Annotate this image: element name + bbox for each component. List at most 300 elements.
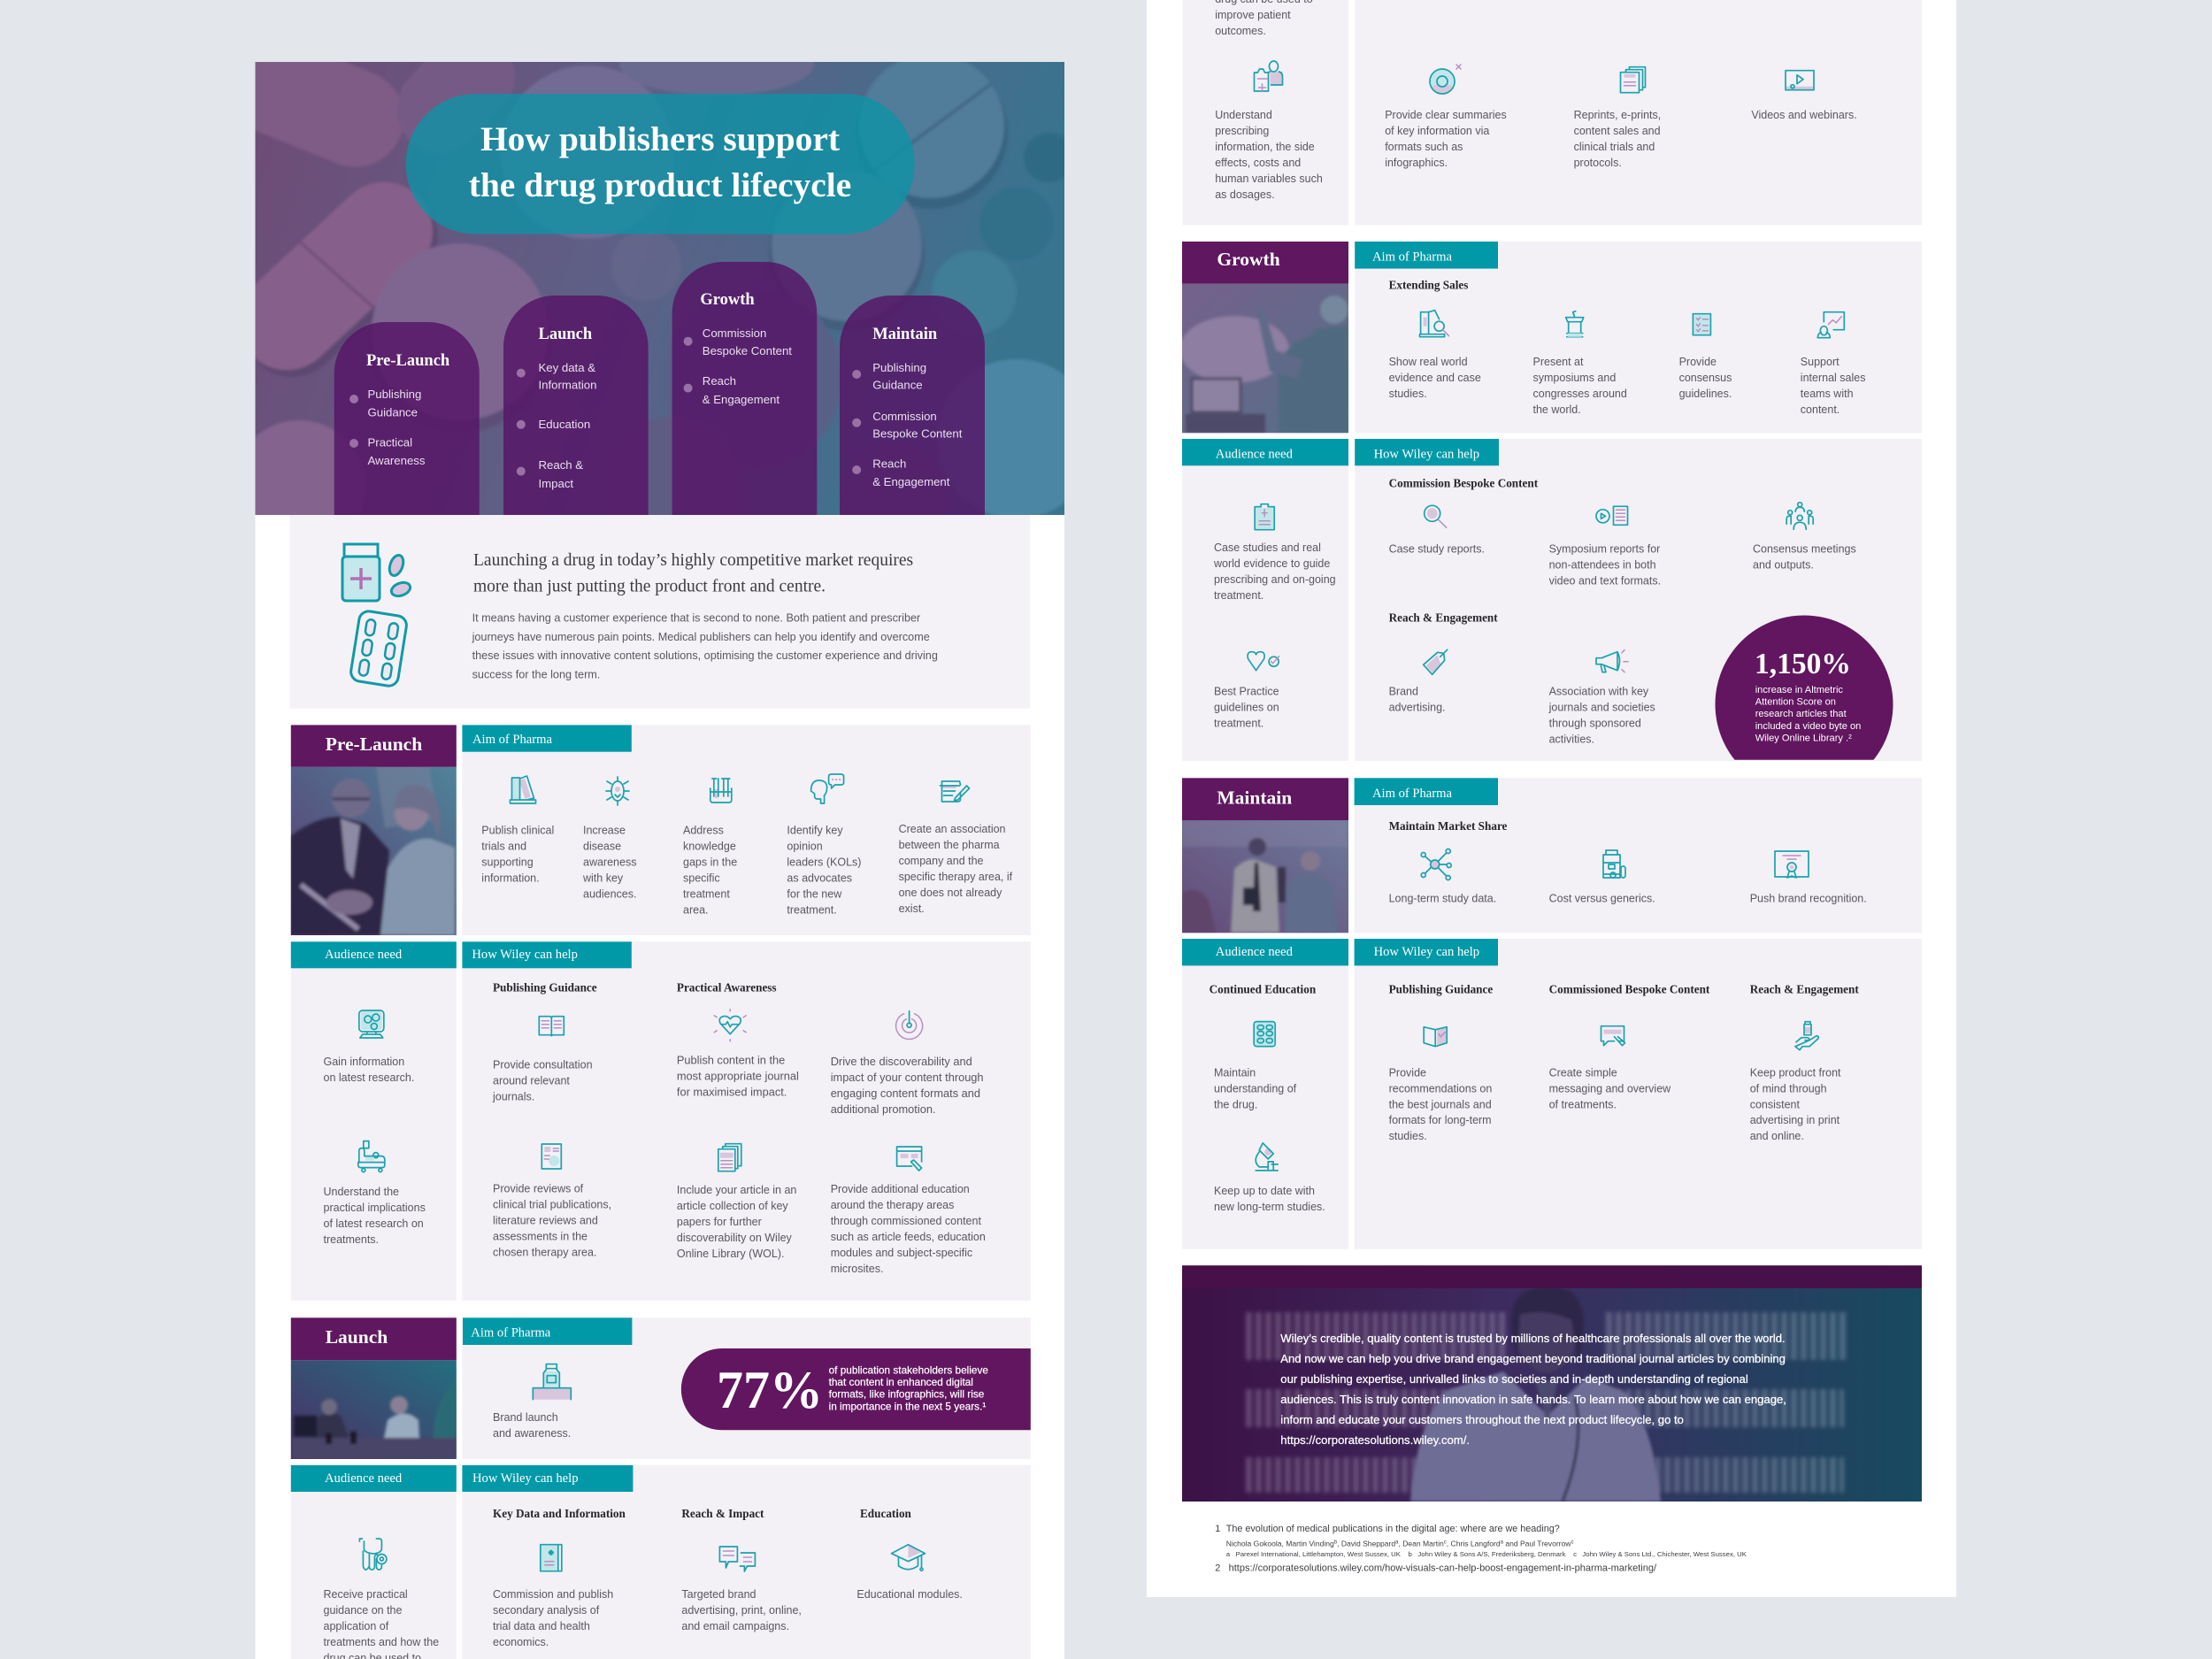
- text: Provide additional education: around the therapy areas: [831, 1199, 954, 1211]
- panel: Launch help continued: [1355, 0, 1922, 225]
- heading: Reach &amp; Engagement: Reach & Engagement: [1389, 611, 1498, 624]
- tab: How Wiley can help: [1355, 439, 1499, 465]
- text: Identify key: treatment.: [787, 904, 837, 917]
- icon: clipboard and person: [1255, 61, 1283, 91]
- icon: podium: [1566, 311, 1584, 337]
- icon: monitor with molecules: [359, 1010, 384, 1038]
- section: Pre-Launch: [290, 725, 1031, 1301]
- references: [1215, 1524, 1747, 1573]
- icon: checklist: [1693, 314, 1710, 335]
- text: Best Practice: treatment.: [1214, 717, 1263, 729]
- tab: Pre-Launch: Guidance: [368, 405, 418, 419]
- references: b: [1334, 1540, 1338, 1545]
- text: Understand prescribing: information, the side: [1215, 141, 1315, 153]
- heading: Reach &amp; Engagement: Reach & Engagement: [1750, 982, 1859, 996]
- panel: Pre-Launch aim: [462, 725, 1031, 935]
- text: improve patient outcomes: outcomes.: [1215, 25, 1266, 37]
- panel: Maintain aim: [1355, 778, 1922, 933]
- intro body: It means having a customer experience that is second to none. Both patient and prescriber: [472, 612, 920, 625]
- text: Videos and webinars: Videos and webinars.: [1751, 109, 1857, 121]
- text: Publish clinical: trials and: [481, 841, 526, 853]
- panel: Maintain aim: Aim of Pharma: [1372, 787, 1453, 801]
- closing text: And now we can help you drive brand engagement beyond traditional journal articles by combining: [1280, 1352, 1786, 1365]
- tab: Launch: Education: [538, 418, 590, 431]
- text: Drive the discoverability: Drive the discoverability and: [831, 1055, 972, 1068]
- text: Create an association: one does not already: [899, 887, 1002, 899]
- text: Provide recommendations: the best journals and: [1389, 1098, 1492, 1110]
- text: Long-term study data: Long-term study data.: [1389, 893, 1496, 905]
- text: Create an association: exist.: [899, 902, 925, 915]
- text: Association: activities.: [1549, 733, 1594, 745]
- references: https://corporatesolutions.wiley.com/how-visuals-can-help-boost-engagement-in-pharma-marketing/: [1229, 1563, 1657, 1573]
- text: Show real world: Show real world: [1389, 356, 1468, 368]
- panel: Pre-Launch header and photo: [290, 725, 457, 935]
- text: Provide clear summaries: Provide clear summaries: [1385, 109, 1507, 121]
- panel: Maintain header and photo: Maintain: [1217, 787, 1292, 809]
- panel: Growth header and photo: Growth: [1217, 249, 1280, 270]
- text: Association: journals and societies: [1548, 701, 1655, 713]
- text: Publish content: for maximised impact.: [677, 1085, 787, 1099]
- icon: stethoscope: [359, 1539, 387, 1570]
- text: improve patient outcomes: improve patient: [1215, 9, 1291, 21]
- text: Receive practical: guidance on the: [324, 1604, 403, 1617]
- icon: KOL head and speech: [811, 774, 844, 803]
- text: Commission and publish: Commission and publish: [493, 1588, 613, 1601]
- closing text: audiences. This is truly content innovation in safe hands. To learn more about how we can engage,: [1280, 1393, 1786, 1406]
- tab: Audience need: [1182, 939, 1348, 965]
- text: Understand the practical: practical implications: [324, 1202, 426, 1214]
- text: Address knowledge: gaps in the: [683, 856, 737, 869]
- closing text: inform and educate your customers throughout the next product lifecycle, go to: [1280, 1413, 1684, 1426]
- panel: Launch how Wiley can help: How Wiley can help: [472, 1471, 579, 1486]
- icon: article stack: [718, 1144, 741, 1171]
- section: Growth: [1179, 242, 1922, 793]
- text: Brand advertising: advertising.: [1389, 701, 1446, 713]
- text: Provide clear summaries: formats such as: [1385, 141, 1463, 153]
- tab: Maintain: Reach: [872, 457, 906, 471]
- icon: magnifier chart: [1425, 505, 1447, 527]
- text: Provide reviews: literature reviews and: [493, 1214, 598, 1226]
- tab: Audience need: [1182, 439, 1348, 465]
- text: Increase disease: audiences.: [583, 888, 636, 901]
- icon: microscope: [1256, 1143, 1278, 1171]
- intro body: journeys have numerous pain points. Medical publishers can help you identify and overcome: [472, 631, 930, 643]
- text: Symposium reports: non-attendees in both: [1549, 558, 1656, 571]
- title pill: [406, 94, 915, 234]
- tab: Launch: Reach &: [538, 458, 583, 472]
- icon: book with check: [1424, 1027, 1447, 1047]
- tab: Growth: Commission: [703, 326, 766, 340]
- text: Identify key: leaders (KOLs): [787, 856, 861, 869]
- text: Drive the discoverability: additional promotion.: [831, 1102, 936, 1116]
- text: Address knowledge: treatment: [683, 888, 730, 901]
- photo: doctors with tablet: [290, 762, 455, 935]
- text: Drive the discoverability: engaging content formats and: [831, 1087, 980, 1100]
- heading: Maintain Market Share: Maintain Market Share: [1389, 819, 1508, 833]
- icon: document stack: [1621, 67, 1646, 93]
- references: Nichola Gokoola, Martin Vinding: [1226, 1540, 1334, 1548]
- text: Create an association: between the pharma: [899, 839, 1000, 851]
- icon: bottle on pedestal: [533, 1364, 571, 1400]
- text: Include your article: Online Library (WOL).: [677, 1248, 784, 1260]
- panel: Pre-Launch audience need: [291, 941, 457, 1301]
- text: Best Practice: Best Practice: [1214, 685, 1279, 697]
- panel: Pre-Launch audience need: Audience need: [325, 948, 403, 962]
- header: Pre-Launch: [291, 725, 457, 767]
- closing banner: [1182, 1265, 1922, 1502]
- panel: Launch audience continued: [1182, 0, 1348, 225]
- text: Provide additional education: such as article feeds, education: [831, 1231, 986, 1243]
- panel: Maintain how Wiley can help: How Wiley can help: [1374, 945, 1479, 959]
- panel: Launch how Wiley can help: [462, 1465, 1031, 1659]
- icon: presenter with chart: [1817, 312, 1844, 338]
- icon: medicine bottle and pills: [342, 544, 412, 687]
- panel: Launch aim: [462, 1317, 1031, 1459]
- text: Provide clear summaries: infographics.: [1385, 157, 1448, 169]
- panel: Launch audience need: [291, 1465, 457, 1659]
- callout: 77%: of publication stakeholders believe: [829, 1363, 988, 1376]
- text: Provide reviews: chosen therapy area.: [493, 1246, 596, 1258]
- text: Increase disease: with key: [582, 872, 624, 885]
- header: Maintain: [1182, 778, 1348, 820]
- tab: Pre-Launch: Awareness: [368, 454, 426, 467]
- callout: 77%: in importance in the next 5 years.¹: [829, 1400, 986, 1412]
- references: , Dean Martin: [1398, 1540, 1444, 1548]
- callout: 77%: that content in enhanced digital: [829, 1376, 973, 1388]
- heading: Publishing Guidance: Publishing Guidance: [1389, 982, 1493, 996]
- photo: doctor in library: [1246, 1286, 1847, 1502]
- tab: Launch: [503, 296, 649, 515]
- icon: donut chart: [1430, 65, 1461, 94]
- text: Understand the practical: Understand the: [324, 1186, 399, 1198]
- left white page: [255, 62, 1064, 1659]
- header: Launch: [291, 1317, 457, 1360]
- icon: megaphone: [1596, 650, 1628, 672]
- photo: team meeting: [292, 1379, 457, 1459]
- text: Provide consultation: journals.: [492, 1091, 534, 1103]
- text: Provide consultation: Provide consultation: [493, 1059, 593, 1071]
- hero banner: [255, 62, 1064, 515]
- text: Case study reports: Case study reports.: [1389, 542, 1485, 555]
- tab: Launch: Launch: [538, 326, 593, 343]
- text: Drive the discoverability: impact of your content through: [831, 1071, 984, 1084]
- text: Provide recommendations: Provide: [1389, 1067, 1426, 1079]
- photo: doctors walking: [1182, 820, 1348, 933]
- tab: Maintain: & Engagement: [872, 475, 950, 488]
- tab: How Wiley can help: [462, 941, 632, 968]
- text: Receive practical: treatments and how the: [324, 1636, 439, 1648]
- references: The evolution of medical publications in the digital age: where are we heading?: [1226, 1524, 1560, 1534]
- text: Create an association: company and the: [899, 855, 984, 867]
- text: Symposium reports: Symposium reports for: [1549, 542, 1660, 555]
- text: Provide reviews: Provide reviews of: [493, 1182, 583, 1194]
- text: Association: Association with key: [1549, 685, 1648, 697]
- references: a: [1395, 1540, 1399, 1545]
- text: Create simple: Create simple: [1549, 1067, 1617, 1079]
- text: Publish clinical: Publish clinical: [481, 825, 554, 837]
- tab: Aim of Pharma: [463, 1317, 632, 1345]
- icon: hand holding bottle: [1795, 1022, 1818, 1050]
- panel: Growth aim: [1355, 242, 1922, 433]
- callout: 1,150%: research articles that: [1755, 709, 1847, 719]
- text: Publish content: most appropriate journal: [677, 1069, 799, 1083]
- closing text: our publishing expertise, unrivalled links to societies and in-depth understanding of regional: [1280, 1372, 1748, 1386]
- section: Maintain: [1182, 778, 1922, 1249]
- text: Present at symposiums: symposiums and: [1532, 372, 1616, 384]
- callout: 1,150%: included a video byte on: [1755, 721, 1861, 732]
- hero pills photo: [255, 62, 1064, 515]
- text: Publish content: Publish content in the: [677, 1053, 785, 1067]
- text: Support internal sales: teams with: [1801, 388, 1854, 400]
- panel: Growth how Wiley can help: How Wiley can help: [1374, 448, 1479, 462]
- text: Keep product front: Keep product front: [1750, 1067, 1841, 1079]
- panel: Maintain how Wiley can help: [1355, 939, 1922, 1249]
- tab: Growth: Reach: [703, 374, 736, 388]
- text: Brand launch: Brand launch: [493, 1411, 558, 1424]
- text: Create an association: Create an association: [899, 823, 1006, 835]
- text: Targeted brand: and email campaigns.: [681, 1620, 789, 1632]
- icon: screen and pen: [1601, 1026, 1624, 1046]
- closing text: https://corporatesolutions.wiley.com/.: [1280, 1433, 1470, 1447]
- references: c: [1444, 1540, 1447, 1545]
- text: Maintain understanding: the drug.: [1214, 1098, 1257, 1110]
- tab: Growth: Growth: [700, 291, 755, 309]
- references: 1: [1215, 1524, 1220, 1534]
- panel: Growth header and photo: [1179, 242, 1348, 433]
- tab: Aim of Pharma: [1355, 242, 1498, 269]
- references: a Parexel International, Littlehampton, West Sussex, UK b John Wiley & Sons A/S, Frederiksberg, Denmark c John Wiley & Sons Ltd., Chichester, West Sussex, UK: [1226, 1550, 1747, 1558]
- references: , David Sheppard: [1337, 1540, 1395, 1548]
- text: Provide additional education: modules and subject-specific: [831, 1247, 972, 1259]
- text: Case studies: treatment.: [1214, 589, 1263, 602]
- text: Maintain understanding: understanding of: [1214, 1082, 1297, 1094]
- heading: Publishing Guidance: Publishing Guidance: [493, 980, 597, 995]
- text: Identify key: opinion: [787, 841, 823, 853]
- text: Address knowledge: knowledge: [683, 841, 736, 853]
- text: Present at symposiums: the world.: [1532, 403, 1581, 416]
- text: Keep product front: advertising in print: [1750, 1114, 1840, 1126]
- photo: conference speaker: [1179, 296, 1348, 433]
- text: Understand prescribing: as dosages.: [1215, 188, 1275, 201]
- tab: Audience need: [291, 1465, 457, 1492]
- text: Reprints, e-prints: protocols.: [1574, 157, 1622, 169]
- tab: Maintain: Bespoke Content: [872, 426, 963, 440]
- callout: 1,150%: Wiley Online Library .²: [1755, 733, 1852, 743]
- text: Reprints, e-prints: content sales and: [1574, 125, 1661, 137]
- text: Increase disease: Increase: [583, 825, 626, 837]
- text: Understand prescribing: prescribing: [1215, 125, 1269, 137]
- text: Increase disease: awareness: [583, 856, 636, 869]
- references: c: [1571, 1540, 1573, 1545]
- text: Address knowledge: area.: [683, 904, 708, 917]
- icon: video player: [1786, 71, 1814, 90]
- text: Reprints, e-prints: clinical trials and: [1574, 141, 1655, 153]
- text: Reprints, e-prints: Reprints, e-prints,: [1574, 109, 1661, 121]
- text: Educational modules: Educational modules.: [856, 1588, 963, 1601]
- text: Provide recommendations: formats for long-term: [1389, 1114, 1492, 1126]
- text: Provide recommendations: recommendations on: [1389, 1082, 1492, 1094]
- closing text: Wiley’s credible, quality content is trusted by millions of healthcare professionals all over the world.: [1280, 1332, 1786, 1345]
- tab: Growth: [672, 262, 817, 515]
- icon: medical book: [541, 1545, 562, 1571]
- tab: Pre-Launch: Practical: [368, 435, 412, 449]
- text: Case studies: Case studies and real: [1214, 541, 1321, 554]
- tab: Aim of Pharma: [1355, 778, 1498, 805]
- icon: chat bubbles: [719, 1547, 755, 1571]
- icon: network: [1421, 849, 1451, 879]
- text: Support internal sales: internal sales: [1801, 372, 1865, 384]
- panel: introduction: [289, 515, 1030, 709]
- callout: 1,150%: increase in Altmetric: [1755, 685, 1843, 695]
- heading: Reach &amp; Impact: Reach & Impact: [681, 1507, 764, 1520]
- text: Address knowledge: specific: [683, 872, 720, 885]
- tab: Aim of Pharma: [462, 725, 632, 752]
- text: Association: through sponsored: [1549, 717, 1641, 729]
- text: Understand prescribing: human variables such: [1215, 173, 1323, 185]
- text: Keep product front: and online.: [1750, 1130, 1804, 1142]
- title: How publishers support: [480, 119, 840, 158]
- tab: Growth: Bespoke Content: [703, 344, 792, 357]
- text: Provide reviews: assessments in the: [493, 1230, 588, 1242]
- tab: Audience need: [291, 941, 457, 968]
- right white page: [1147, 0, 1956, 1597]
- tab: Pre-Launch: [334, 322, 480, 515]
- text: Targeted brand: advertising, print, online,: [681, 1604, 802, 1617]
- text: Brand advertising: Brand: [1389, 685, 1418, 697]
- icon: graduation cap: [892, 1545, 926, 1571]
- callout: 77%: formats, like infographics, will rise: [829, 1388, 985, 1401]
- icon: clipboard: [1255, 504, 1274, 530]
- heading: Continued Education: Continued Education: [1210, 982, 1317, 996]
- text: Provide consultation: around relevant: [493, 1075, 570, 1087]
- text: Keep product front: consistent: [1750, 1098, 1801, 1110]
- text: Show real world: studies.: [1389, 388, 1427, 400]
- text: Keep up to date: Keep up to date with: [1214, 1185, 1315, 1197]
- references: 2: [1215, 1563, 1220, 1573]
- panel: Growth audience need: Audience need: [1216, 448, 1294, 462]
- heading: Commission Bespoke Content: Commission Bespoke Content: [1389, 476, 1539, 490]
- panel: Launch audience need: Audience need: [325, 1471, 403, 1486]
- heading: Practical Awareness: Practical Awareness: [677, 980, 777, 995]
- panel: Growth how Wiley can help: [1355, 439, 1922, 793]
- text: Identify key: as advocates: [787, 872, 852, 885]
- text: Maintain understanding: Maintain: [1214, 1067, 1256, 1079]
- text: Understand prescribing: Understand: [1215, 109, 1272, 121]
- icon: books and magnifier: [1420, 311, 1449, 337]
- header: Growth: [1182, 242, 1348, 284]
- icon: medicine bottle with pills: [1603, 850, 1625, 878]
- text: Case studies: world evidence to guide: [1213, 557, 1330, 570]
- text: Publish clinical: supporting: [481, 856, 534, 869]
- tab: Maintain: Commission: [872, 410, 937, 423]
- text: Create simple: of treatments.: [1549, 1098, 1617, 1110]
- text: Identify key: for the new: [787, 888, 842, 901]
- text: Provide consensus: guidelines.: [1679, 388, 1732, 400]
- panel: Pre-Launch header and photo: Pre-Launch: [326, 733, 422, 755]
- text: Gain information: Gain information: [324, 1056, 404, 1068]
- icon: notepad and pen: [940, 781, 970, 802]
- text: Consensus meetings: Consensus meetings: [1753, 542, 1856, 555]
- section: Launch continued: [1182, 0, 1922, 225]
- heading: Extending Sales: Extending Sales: [1389, 278, 1468, 292]
- text: Publish clinical: information.: [481, 872, 540, 885]
- panel: Maintain audience need: Audience need: [1216, 945, 1294, 959]
- text: Include your article: article collection of key: [677, 1200, 788, 1212]
- text: Commission and publish: economics.: [493, 1636, 549, 1648]
- panel: Maintain audience need: [1182, 939, 1348, 1249]
- text: Understand the practical: treatments.: [324, 1233, 379, 1246]
- intro body: these issues with innovative content solutions, optimising the customer experience and driving: [472, 649, 938, 662]
- intro heading: Launching a drug in today’s highly competitive market requires: [473, 551, 913, 570]
- icon: report document: [541, 1144, 561, 1169]
- text: Commission and publish: trial data and health: [493, 1620, 590, 1632]
- text: Create an association: specific therapy area, if: [899, 871, 1013, 883]
- callout: 77%: 77%: [717, 1361, 823, 1419]
- references: and Paul Trevorrow: [1503, 1540, 1571, 1548]
- tab: Pre-Launch: Pre-Launch: [366, 352, 450, 370]
- icon: consensus meeting: [1786, 503, 1813, 529]
- text: Support internal sales: Support: [1801, 356, 1839, 368]
- icon: germ: [606, 777, 629, 805]
- icon: books: [510, 776, 536, 803]
- text: Receive practical: application of: [324, 1620, 389, 1632]
- icon: open book: [539, 1017, 564, 1036]
- heading: Education: Education: [860, 1507, 912, 1520]
- tab: Growth: & Engagement: [703, 393, 780, 406]
- text: Keep up to date: new long-term studies.: [1214, 1201, 1325, 1213]
- text: Present at symposiums: congresses around: [1532, 388, 1627, 400]
- icon: test tubes: [710, 779, 732, 803]
- text: Symposium reports: video and text formats.: [1549, 574, 1661, 587]
- text: Create simple: messaging and overview: [1549, 1082, 1671, 1094]
- icon: target dial: [896, 1011, 923, 1039]
- tab: Maintain: [840, 296, 985, 515]
- text: Show real world: evidence and case: [1389, 372, 1481, 384]
- panel: Pre-Launch aim: Aim of Pharma: [472, 733, 553, 747]
- text: Provide reviews: clinical trial publications,: [493, 1198, 611, 1210]
- panel: Pre-Launch how Wiley can help: How Wiley can help: [472, 948, 578, 962]
- text: Include your article: discoverability on Wiley: [677, 1232, 793, 1244]
- tab: How Wiley can help: [1355, 939, 1498, 965]
- text: Gain information: on latest research.: [324, 1071, 414, 1084]
- text: Best Practice: guidelines on: [1214, 701, 1279, 713]
- tab: Launch: Key data &: [538, 361, 595, 374]
- panel: Launch header and photo: Launch: [326, 1326, 388, 1348]
- text: Understand the practical: of latest research on: [324, 1217, 424, 1230]
- text: Include your article: papers for further: [677, 1216, 762, 1228]
- text: Brand launch: and awareness.: [493, 1427, 571, 1440]
- text: Cost versus generics: Cost versus generics.: [1549, 893, 1655, 905]
- text: Present at symposiums: Present at: [1532, 356, 1583, 368]
- text: Consensus meetings: and outputs.: [1753, 558, 1814, 571]
- section: Launch: [291, 1317, 1031, 1659]
- tab: Pre-Launch: Publishing: [368, 388, 421, 401]
- references: a: [1501, 1540, 1504, 1545]
- icon: price tag: [1424, 649, 1448, 674]
- icon: play and document: [1596, 506, 1628, 525]
- panel: Launch aim: Aim of Pharma: [471, 1325, 551, 1340]
- intro heading: more than just putting the product front and centre.: [473, 578, 826, 596]
- callout: 1,150%: [1715, 616, 1893, 760]
- text: Understand prescribing: effects, costs and: [1215, 157, 1301, 169]
- text: Provide clear summaries: of key information via: [1385, 125, 1489, 137]
- panel: Launch header and photo: [291, 1317, 457, 1459]
- tab: Maintain: Maintain: [872, 326, 938, 343]
- text: Provide additional education: microsites.: [831, 1263, 883, 1275]
- text: Include your article: Include your article in an: [677, 1184, 796, 1196]
- top strip: [1182, 1265, 1922, 1288]
- icon: pill pack: [1254, 1022, 1275, 1047]
